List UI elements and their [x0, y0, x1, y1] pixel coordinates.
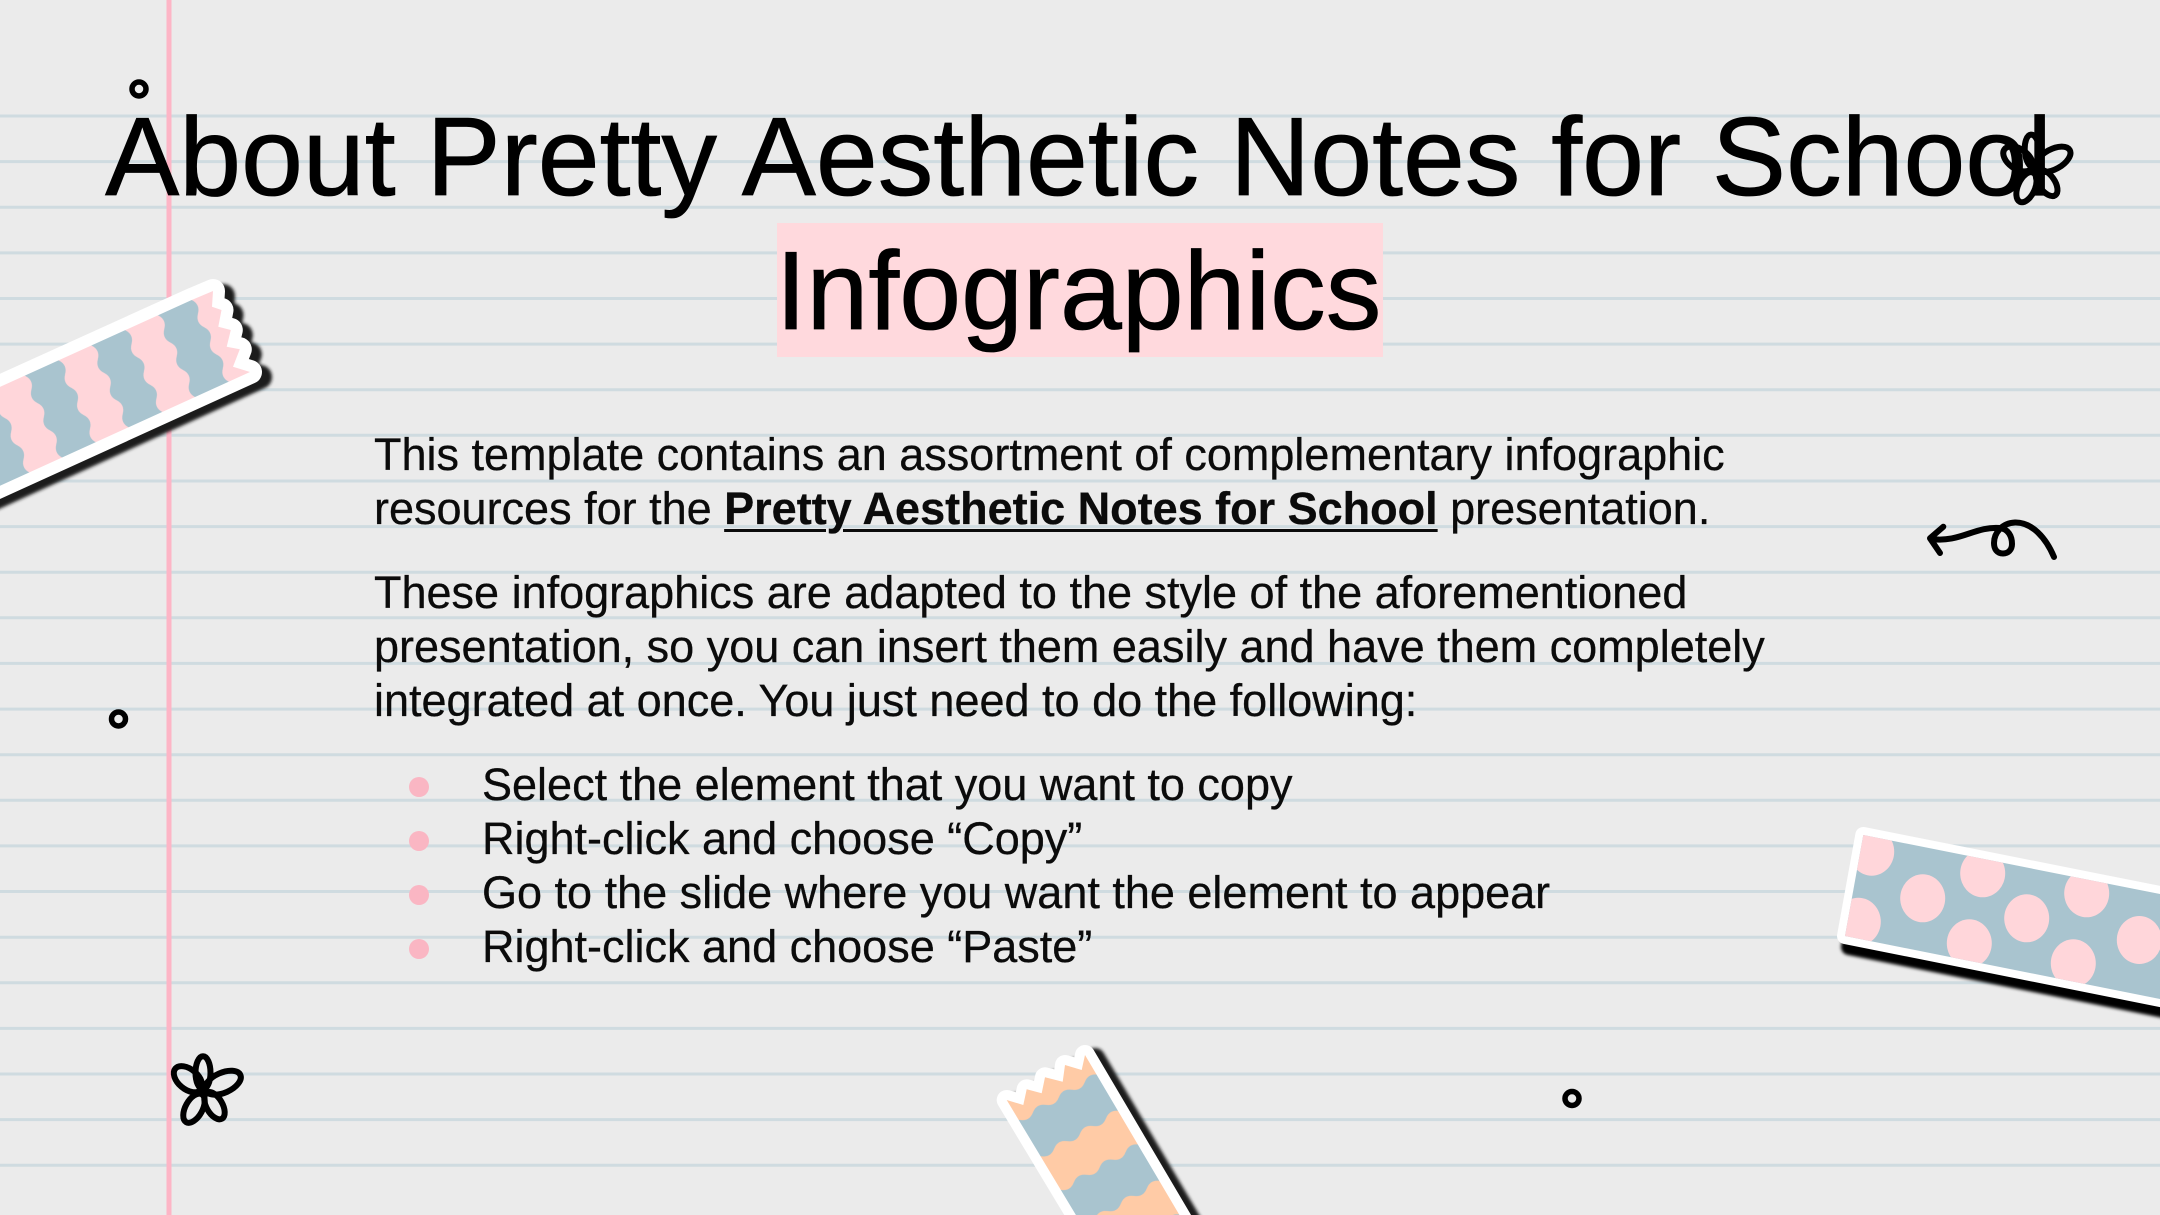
text block: intro paragraph — [374, 429, 1725, 534]
icon: small circle, top left — [132, 82, 146, 96]
arrow: curly hand-drawn arrow pointing left — [1930, 522, 2054, 557]
title highlight — [777, 223, 1383, 357]
tape: peach and blue waves, bottom centre — [1007, 1055, 1216, 1215]
tape: pink and blue waves, top left — [0, 291, 260, 509]
bullet list: Right-click and choose “Paste” — [482, 921, 1092, 972]
bullet list: Select the element that you want to copy — [482, 759, 1292, 810]
tape: blue with pink polka dots, right — [1836, 828, 2160, 1018]
bullet list — [409, 759, 1550, 972]
text block: intro paragraph: resources for the Pretty Aesthetic Notes for School presentation. — [374, 483, 1710, 534]
text block: second paragraph: integrated at once. You just need to do the following: — [374, 675, 1417, 726]
title line 1: About Pretty Aesthetic Notes for School — [105, 94, 2052, 219]
text block: second paragraph — [374, 567, 1765, 726]
icon: flower, bottom left — [169, 1056, 244, 1126]
title line 2: Infographics — [776, 228, 1381, 352]
text block: intro paragraph: This template contains an assortment of complementary infographic — [374, 429, 1725, 480]
icon: small circle, left — [112, 712, 126, 726]
text block: second paragraph: presentation, so you can insert them easily and have them completely — [374, 621, 1765, 672]
text block: second paragraph: These infographics are adapted to the style of the aforementioned — [374, 567, 1687, 618]
bullet list: Go to the slide where you want the element to appear — [482, 867, 1550, 918]
icon: small circle, bottom — [1565, 1092, 1579, 1106]
icon: flower, top right — [1997, 131, 2078, 207]
bullet list: Right-click and choose “Copy” — [482, 813, 1082, 864]
